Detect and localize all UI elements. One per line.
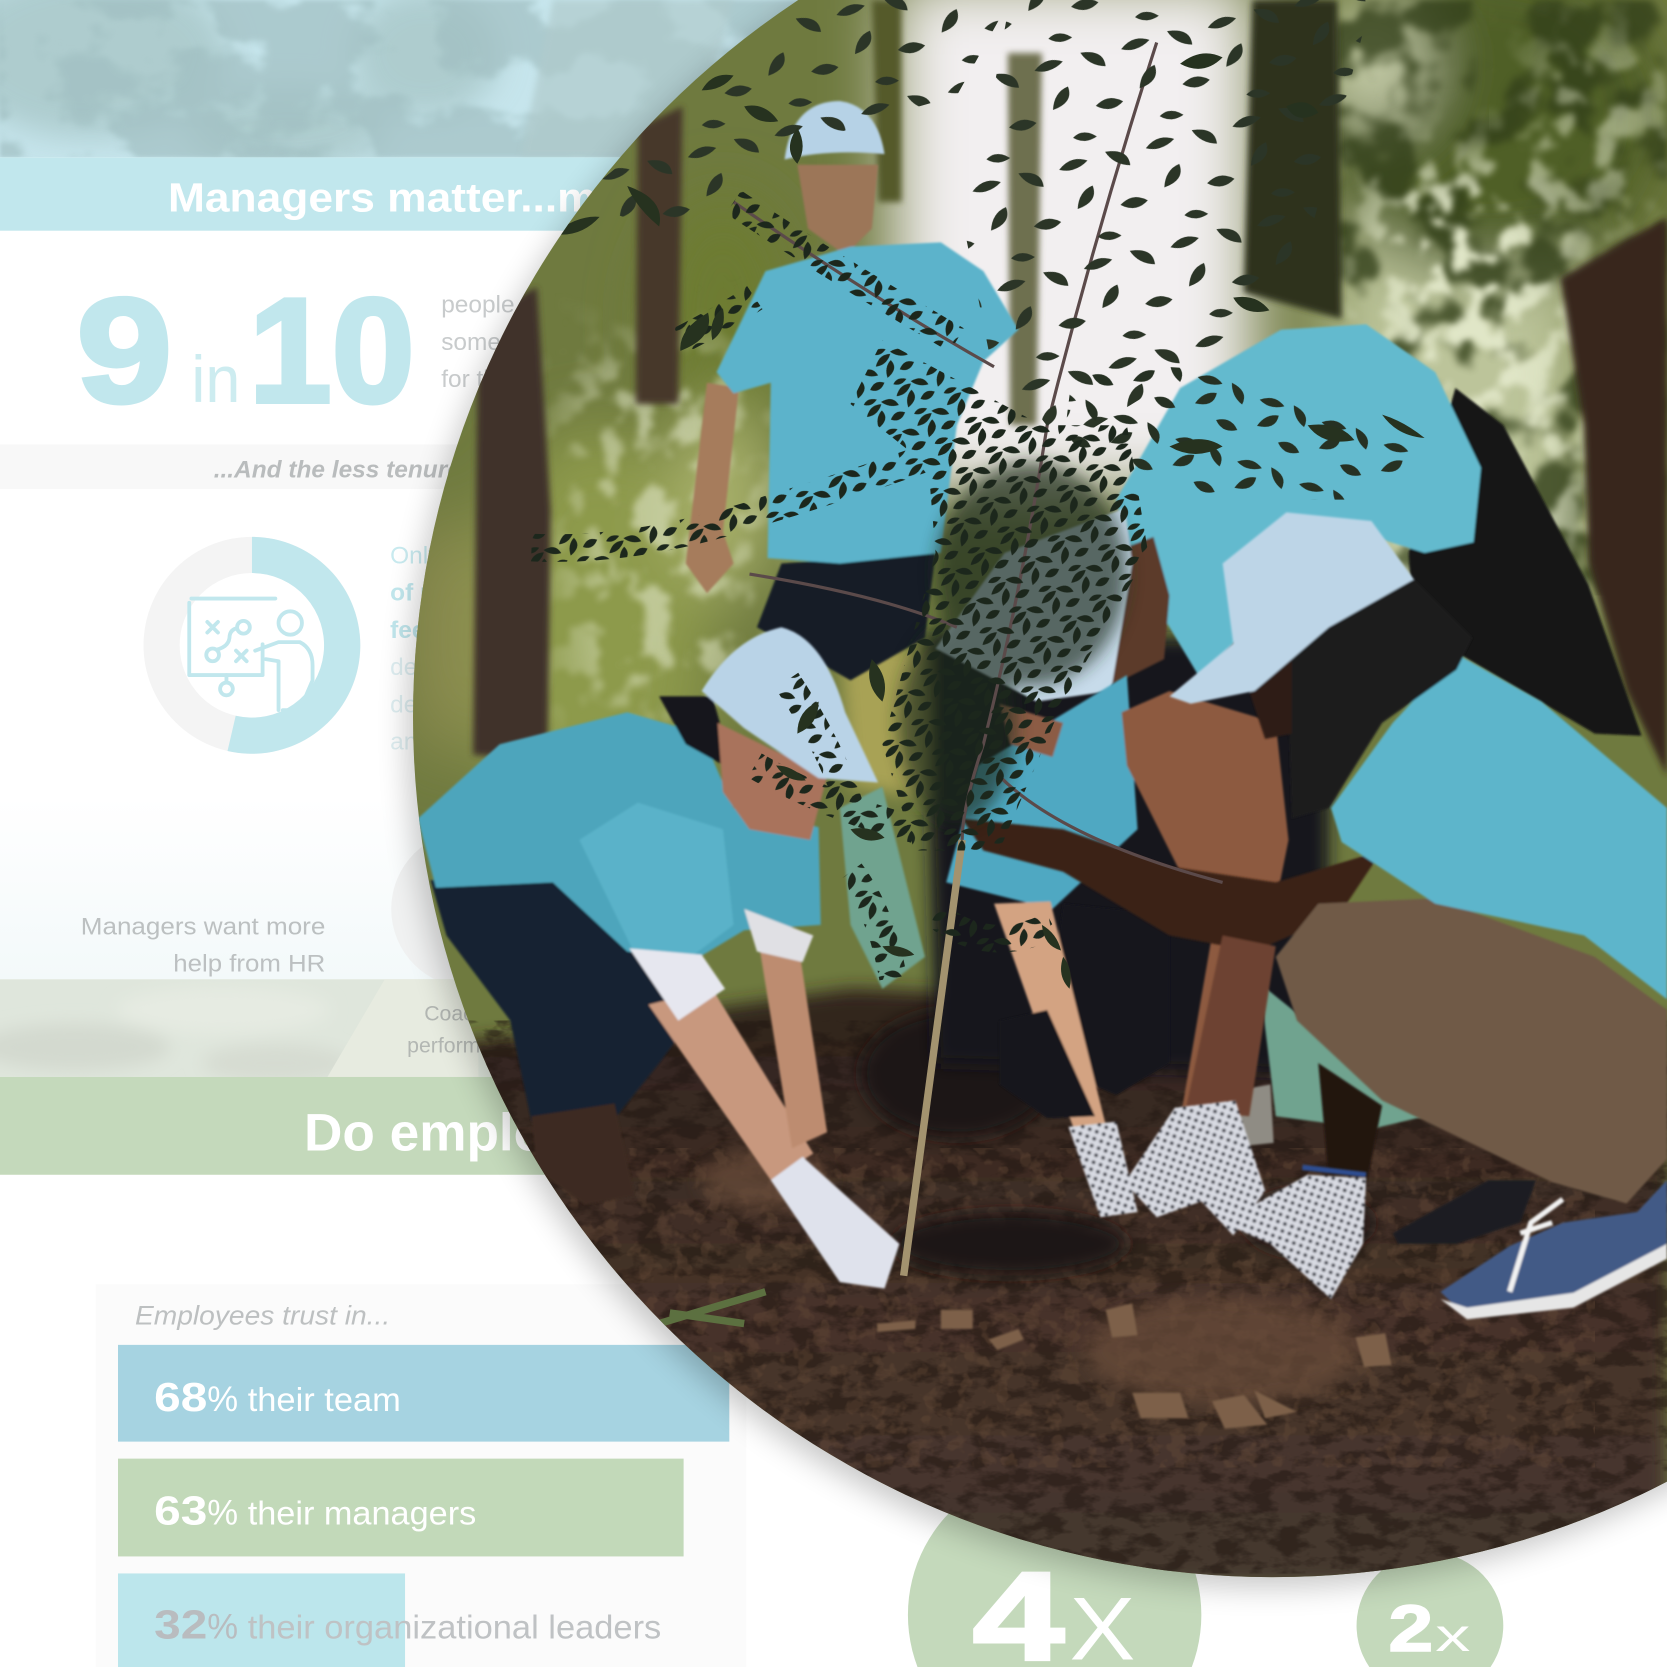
bar: 68% their team: 68 [154, 1374, 207, 1420]
panel: employee trust bars [96, 1284, 746, 1667]
bar: 63% their managers: their managers [248, 1495, 476, 1532]
sub-heading band: ...And the less tenure [214, 456, 461, 483]
stat circle: 2x [1357, 1552, 1503, 1667]
section heading band: do employees: Do employees [304, 1103, 664, 1162]
washed forest photo header [0, 0, 798, 158]
ground [404, 989, 1667, 1584]
bar: 32% their organizational leaders [118, 1573, 661, 1667]
stat description text: someone is [441, 329, 566, 356]
donut caption text [390, 542, 469, 756]
bar: 68% their team: their team [248, 1381, 401, 1418]
woman on the left [418, 627, 899, 1289]
section heading band: managers matter: Managers matter...more [168, 175, 666, 221]
donut caption text: deliver [390, 691, 462, 718]
stat description text: for them [441, 366, 531, 393]
sapling stake [904, 840, 962, 1276]
donut caption text: deliver [390, 654, 462, 681]
donut caption text: of new [390, 580, 469, 607]
stat: 9 in 10 [77, 267, 415, 434]
stat: 9 in 10: 9 [77, 267, 172, 434]
managers want more help text: Managers want more [81, 913, 325, 940]
donut caption text: Only [390, 542, 441, 569]
sub-heading band [0, 444, 744, 489]
stat circle: 2x: x [1435, 1609, 1470, 1661]
coaching caption text [407, 1002, 526, 1058]
dark gap behind the group [840, 638, 1329, 1074]
photo: volunteers planting a tree [404, 0, 1667, 1584]
stat circle: 4x [908, 1468, 1201, 1667]
bending man [936, 324, 1641, 736]
photo circle shadow [407, 0, 1667, 1587]
icon: presenter at strategy board [189, 599, 313, 710]
bar: 32% their organizational leaders: their organizational leaders [248, 1608, 661, 1645]
pale fade background panel [0, 797, 638, 979]
grey icon circle [391, 830, 549, 988]
coaching caption text: Coaching [424, 1002, 514, 1026]
bar: 63% their managers: 63 [154, 1488, 207, 1534]
section heading band: do employees [0, 1077, 744, 1175]
stat: 9 in 10: in [191, 342, 240, 416]
standing man [686, 101, 1018, 680]
bar: 32% their organizational leaders: % [207, 1607, 238, 1646]
bar: 68% their team [118, 1345, 729, 1442]
stat: 9 in 10: 10 [249, 267, 415, 434]
donut caption text: feel [390, 617, 432, 644]
stat description text: people say their [441, 292, 614, 319]
stat description text [441, 292, 614, 393]
trust chart heading: Employees trust in... [135, 1301, 390, 1331]
woman on the right [962, 512, 1667, 1319]
bar: 63% their managers: % [207, 1494, 238, 1533]
sapling foliage [532, 0, 1430, 989]
washed green photo strip [0, 979, 492, 1077]
dotted gloves [1068, 1100, 1366, 1299]
bar: 32% their organizational leaders: 32 [154, 1601, 207, 1647]
section heading band: managers matter [0, 157, 744, 231]
donut caption text: and [390, 729, 431, 756]
forest background [404, 0, 1667, 851]
managers want more help text [81, 913, 325, 978]
bar: 68% their team: % [207, 1380, 238, 1419]
bar: 63% their managers [118, 1459, 684, 1556]
green sacks [840, 787, 1425, 1129]
stat circle: 2x: 2 [1388, 1591, 1433, 1665]
coaching caption text: performance [407, 1034, 526, 1058]
donut chart with strategy icon [162, 537, 360, 754]
centre person and kneeling legs [946, 675, 1289, 1148]
managers want more help text: help from HR [173, 951, 325, 978]
